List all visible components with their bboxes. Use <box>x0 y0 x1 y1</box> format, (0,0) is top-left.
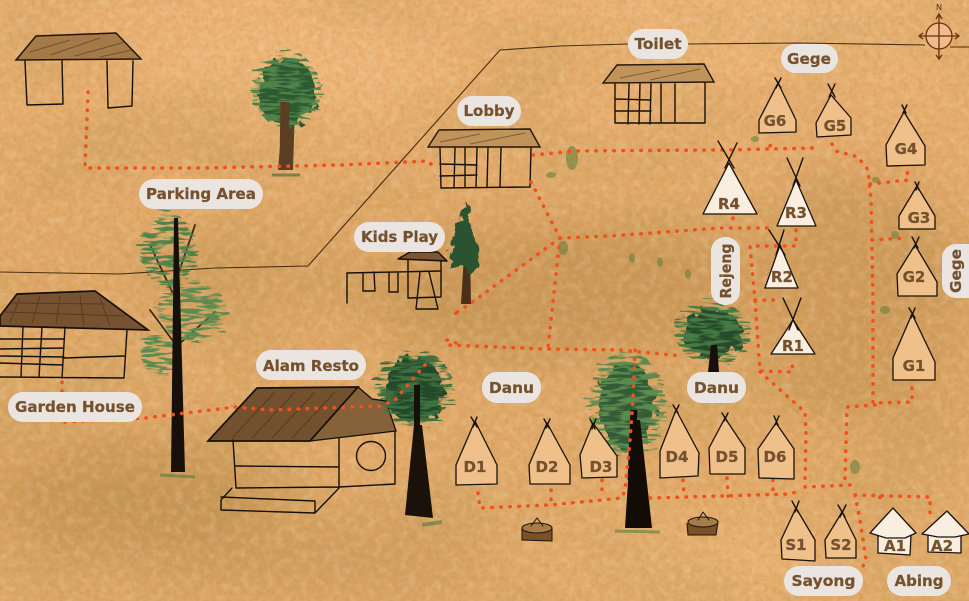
label: Alam Resto: Alam Resto <box>263 357 359 375</box>
fire pit right <box>687 512 718 535</box>
tents: Danu group <box>456 405 794 485</box>
tent G6 <box>759 78 796 133</box>
label: Alam Resto <box>256 350 366 380</box>
tent G4 <box>886 105 925 166</box>
label: Danu right <box>687 372 746 403</box>
label: Gege top: Gege <box>787 50 831 68</box>
tent D4 <box>660 405 699 478</box>
building: alam resto <box>208 387 396 513</box>
tent G2: G2 <box>903 268 925 286</box>
tents: Gege group <box>759 78 937 380</box>
tents: Sayong group <box>781 501 856 561</box>
label: Abing <box>887 566 951 596</box>
tent R4 <box>703 141 757 214</box>
tent G2 <box>897 237 937 296</box>
tent G1 <box>893 308 935 380</box>
label: Kids Play: Kids Play <box>361 228 438 246</box>
hut A2: A2 <box>931 537 953 555</box>
label: Parking Area: Parking Area <box>146 185 256 203</box>
tent D5: D5 <box>716 448 738 466</box>
building: garden house <box>0 291 148 378</box>
tent R1: R1 <box>782 337 804 355</box>
label: Kids Play <box>354 222 445 252</box>
hut A1: A1 <box>884 537 906 555</box>
label: Toilet: Toilet <box>634 35 682 53</box>
tent S2: S2 <box>830 536 852 554</box>
tent G6: G6 <box>764 112 786 130</box>
label: Lobby: Lobby <box>464 102 515 120</box>
tents: Rejeng group <box>703 141 816 355</box>
label: Toilet <box>628 29 688 59</box>
tent G5 <box>816 84 851 137</box>
label: Rejeng <box>711 237 740 305</box>
tree: danu <box>674 302 750 372</box>
building: toilet <box>603 64 714 124</box>
label: Parking Area <box>139 179 263 209</box>
tent G5: G5 <box>824 117 846 135</box>
building: lobby <box>428 129 540 188</box>
tent D6: D6 <box>764 448 786 466</box>
building: parking shelter <box>16 33 141 108</box>
tent G1: G1 <box>903 357 925 375</box>
label: Rejeng: Rejeng <box>717 244 735 298</box>
property boundary line <box>0 43 969 274</box>
tent R2 <box>765 230 798 288</box>
tent R1 <box>771 298 815 355</box>
fire pit left <box>522 518 552 541</box>
compass: N <box>936 3 942 12</box>
tent D5 <box>709 413 745 474</box>
label: Abing: Abing <box>894 572 944 590</box>
playground: kids play <box>347 252 447 309</box>
label: Gege right <box>942 244 969 298</box>
label: Garden House: Garden House <box>15 398 135 416</box>
tent D2: D2 <box>536 458 558 476</box>
tent D3: D3 <box>590 458 612 476</box>
tent R3: R3 <box>785 204 807 222</box>
grass tufts <box>546 136 899 474</box>
tent S1: S1 <box>785 536 807 554</box>
label: Gege right: Gege <box>947 249 965 293</box>
dotted footpaths <box>62 92 930 570</box>
tent D1 <box>456 417 497 485</box>
label: Gege top <box>781 44 838 73</box>
tent R3 <box>777 158 816 226</box>
tent D1: D1 <box>464 458 486 476</box>
huts: Abing group <box>870 508 969 555</box>
label: Danu right: Danu <box>694 379 739 397</box>
compass <box>919 3 959 59</box>
tree: center <box>589 351 665 532</box>
tree: tall pine <box>140 214 226 477</box>
label: Danu left <box>482 372 541 403</box>
label: Sayong <box>784 566 863 596</box>
tree: alam resto <box>377 350 453 525</box>
label: Garden House <box>8 392 142 422</box>
tent D3 <box>580 419 617 478</box>
tent G4: G4 <box>895 140 917 158</box>
tent D4: D4 <box>666 448 688 466</box>
tree: kids play <box>449 199 481 304</box>
tent D6 <box>758 416 794 479</box>
tent D2 <box>529 419 570 484</box>
tent G3 <box>899 182 935 229</box>
tent R2: R2 <box>771 268 793 286</box>
label: Lobby <box>457 96 521 126</box>
label: Danu left: Danu <box>489 379 534 397</box>
tree: parking <box>253 52 321 175</box>
tent R4: R4 <box>718 195 740 213</box>
tent G3: G3 <box>908 209 930 227</box>
label: Sayong: Sayong <box>792 572 856 590</box>
